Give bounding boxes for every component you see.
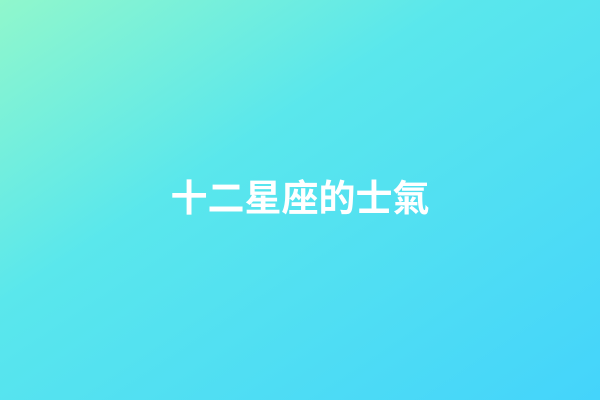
title: 十二星座的士氣 [170, 178, 430, 219]
